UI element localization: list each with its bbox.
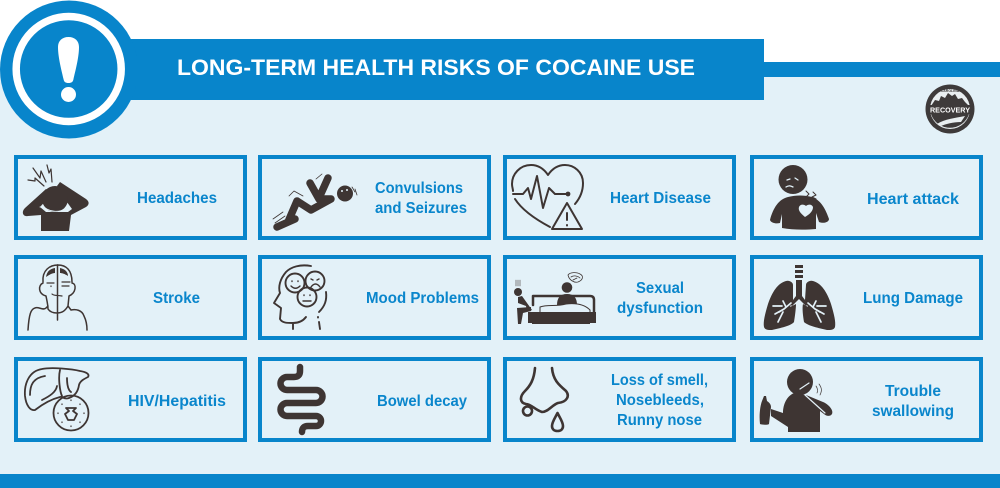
label: Convulsions xyxy=(375,180,463,197)
panel: mood problems xyxy=(260,257,489,338)
icon: couple in bed xyxy=(514,273,596,324)
icon: person with heart pain xyxy=(770,165,829,230)
icon: heart with warning xyxy=(512,165,583,229)
panel: lung damage xyxy=(752,257,981,338)
icon: nose with drip xyxy=(521,368,568,431)
right header stripe xyxy=(760,62,1000,77)
logo: Carolina Recovery seal: CAROLINA xyxy=(941,89,960,93)
label: Stroke xyxy=(153,290,200,307)
label: Headaches xyxy=(137,190,217,207)
panel: loss of smell, nosebleeds, runny nose: Runny nose xyxy=(617,412,702,429)
label: Heart Disease xyxy=(610,190,711,207)
label: Trouble xyxy=(885,383,941,400)
icon: exclamation badge xyxy=(0,0,138,138)
footer bar xyxy=(0,474,1000,488)
label: Sexual xyxy=(636,280,684,297)
panel: trouble swallowing: swallowing xyxy=(872,403,954,420)
icon: intestine xyxy=(280,367,322,432)
panel: stroke xyxy=(16,257,245,338)
icon: head with mood faces xyxy=(274,265,326,329)
panel: heart disease xyxy=(505,157,734,238)
icon: lungs xyxy=(764,265,835,330)
panel: loss of smell, nosebleeds, runny nose: Nosebleeds, xyxy=(616,392,704,409)
logo: Carolina Recovery seal xyxy=(926,84,974,134)
title: LONG-TERM HEALTH RISKS OF COCAINE USE xyxy=(177,55,695,80)
logo: Carolina Recovery seal: RECOVERY xyxy=(930,108,970,114)
label: Heart attack xyxy=(867,191,959,208)
panel: heart attack xyxy=(752,157,981,238)
icon: convulsing figure xyxy=(273,174,357,227)
panel: sexual dysfunction: dysfunction xyxy=(617,300,703,317)
label: Mood Problems xyxy=(366,290,479,307)
panel: trouble swallowing xyxy=(752,359,981,440)
label: Loss of smell, xyxy=(611,372,708,389)
icon: person holding head xyxy=(23,165,89,231)
label: Lung Damage xyxy=(863,290,963,307)
panel: convulsions and seizures: and Seizures xyxy=(375,200,467,217)
panel: loss of smell, nosebleeds, runny nose xyxy=(505,359,734,440)
title banner xyxy=(100,39,764,100)
panel: bowel decay xyxy=(260,359,489,440)
panel: hiv/hepatitis xyxy=(16,359,245,440)
icon: face with facial droop xyxy=(28,265,87,330)
label: Bowel decay xyxy=(377,393,467,410)
panel: headaches xyxy=(16,157,245,238)
panel: convulsions and seizures xyxy=(260,157,489,238)
label: HIV/Hepatitis xyxy=(128,393,226,410)
icon: liver with virus xyxy=(25,368,89,430)
icon: person coughing with bottle xyxy=(760,369,832,432)
panel: sexual dysfunction xyxy=(505,257,734,338)
